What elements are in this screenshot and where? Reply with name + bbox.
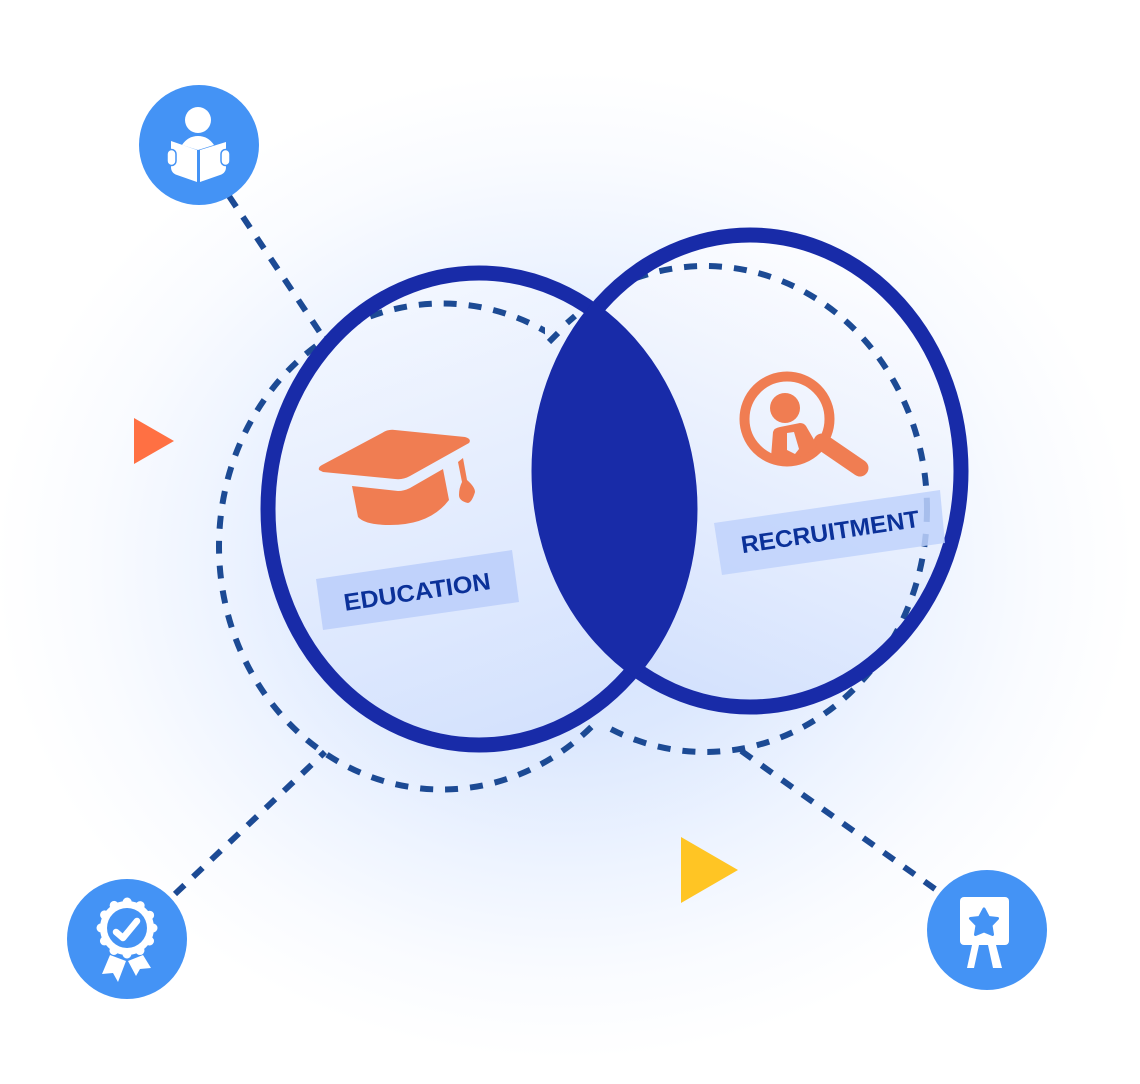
circle outline: recruitment bbox=[539, 235, 961, 707]
label: recruitment: RECRUITMENT bbox=[739, 506, 922, 559]
icon: presentation board with star bbox=[927, 870, 1047, 990]
dashed orbit: junction dashes bbox=[549, 316, 575, 342]
icon: graduation cap bbox=[319, 430, 475, 525]
marker: yellow triangle bbox=[681, 837, 738, 903]
dashed orbit: education bbox=[216, 300, 594, 792]
circle fill: recruitment bbox=[539, 235, 961, 707]
connector: badge to education bbox=[175, 752, 325, 894]
circle fill: education bbox=[268, 273, 690, 745]
circle outline: education bbox=[268, 273, 690, 745]
venn overlap lens bbox=[546, 322, 682, 658]
dashed orbit: recruitment bbox=[610, 263, 930, 755]
label: education bbox=[316, 550, 519, 630]
connector: board to recruitment bbox=[740, 750, 935, 889]
label: education: EDUCATION bbox=[342, 568, 492, 617]
infographic: education and recruitment venn diagram bbox=[67, 85, 1047, 999]
icon: award ribbon bbox=[67, 879, 187, 999]
label: recruitment bbox=[714, 490, 945, 575]
marker: orange triangle bbox=[134, 418, 174, 464]
icon: magnifier with person bbox=[744, 376, 860, 470]
connector: reader to education bbox=[229, 196, 323, 337]
icon: person reading bbox=[139, 85, 259, 205]
